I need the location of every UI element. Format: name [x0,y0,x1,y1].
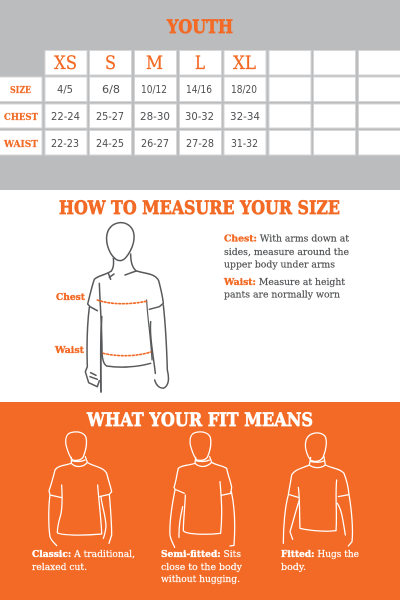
size table: L [195,53,205,74]
text: classic: relaxed cut. [32,562,87,573]
heading: youth: YOUTH [166,17,233,38]
size table: 27-28 [186,138,214,150]
label: chest: Chest [56,292,86,303]
text: semi-fitted [161,549,243,585]
size table: 30-32 [185,111,214,123]
size table: 25-27 [96,111,124,123]
size table: XL [233,53,256,74]
heading: how to measure your size: HOW TO MEASURE YOUR SIZE [59,198,340,219]
size table: 31-32 [231,138,258,150]
size table: 18/20 [231,84,257,96]
size table: 32-34 [230,111,260,123]
size table: S [105,53,116,74]
panel: how to measure [0,190,400,402]
panel: what your fit means [0,402,400,600]
size table: 6/8 [102,84,120,96]
label: waist: Waist [54,345,85,356]
size table: M [146,53,163,74]
icon: man in t-shirt with measure lines [85,223,169,392]
size table: 22-24 [51,111,80,123]
text: chest instructions: Chest: With arms down at [224,234,349,244]
size table: 14/16 [186,84,212,96]
size table: 22-23 [51,138,79,150]
text: waist instructions: Waist: Measure at height [223,277,345,288]
size table: 10/12 [141,84,167,96]
size table: XS [54,53,77,74]
icon: classic fit shirt [49,432,112,546]
text: semi-fitted: Semi-fitted: Sits [161,549,241,560]
text: fitted: body. [281,562,306,573]
text: chest instructions [224,234,349,270]
text: fitted [281,549,359,573]
size table: 26-27 [141,138,169,150]
text: classic [32,549,135,573]
text: semi-fitted: close to the body [161,562,243,573]
size table: 24-25 [96,138,124,150]
text: chest instructions: upper body under arms [224,260,335,270]
size table [0,50,400,155]
size table: CHEST [4,112,38,123]
icon: semi-fitted shirt [170,432,235,547]
text: semi-fitted: without hugging. [161,574,240,585]
icon: fitted shirt [283,433,352,546]
size table: WAIST [3,139,38,150]
text: classic: Classic: A traditional, [32,549,135,560]
size table: 28-30 [140,111,170,123]
text: waist instructions [223,277,345,300]
text: waist instructions: pants are normally worn [224,290,340,300]
size table: SIZE [10,85,31,96]
text: fitted: Fitted: Hugs the [281,549,359,560]
panel: youth size chart [0,0,400,190]
size table: 4/5 [57,84,73,96]
text: chest instructions: sides, measure around the [224,247,349,258]
heading: what your fit means: WHAT YOUR FIT MEANS [86,410,313,431]
